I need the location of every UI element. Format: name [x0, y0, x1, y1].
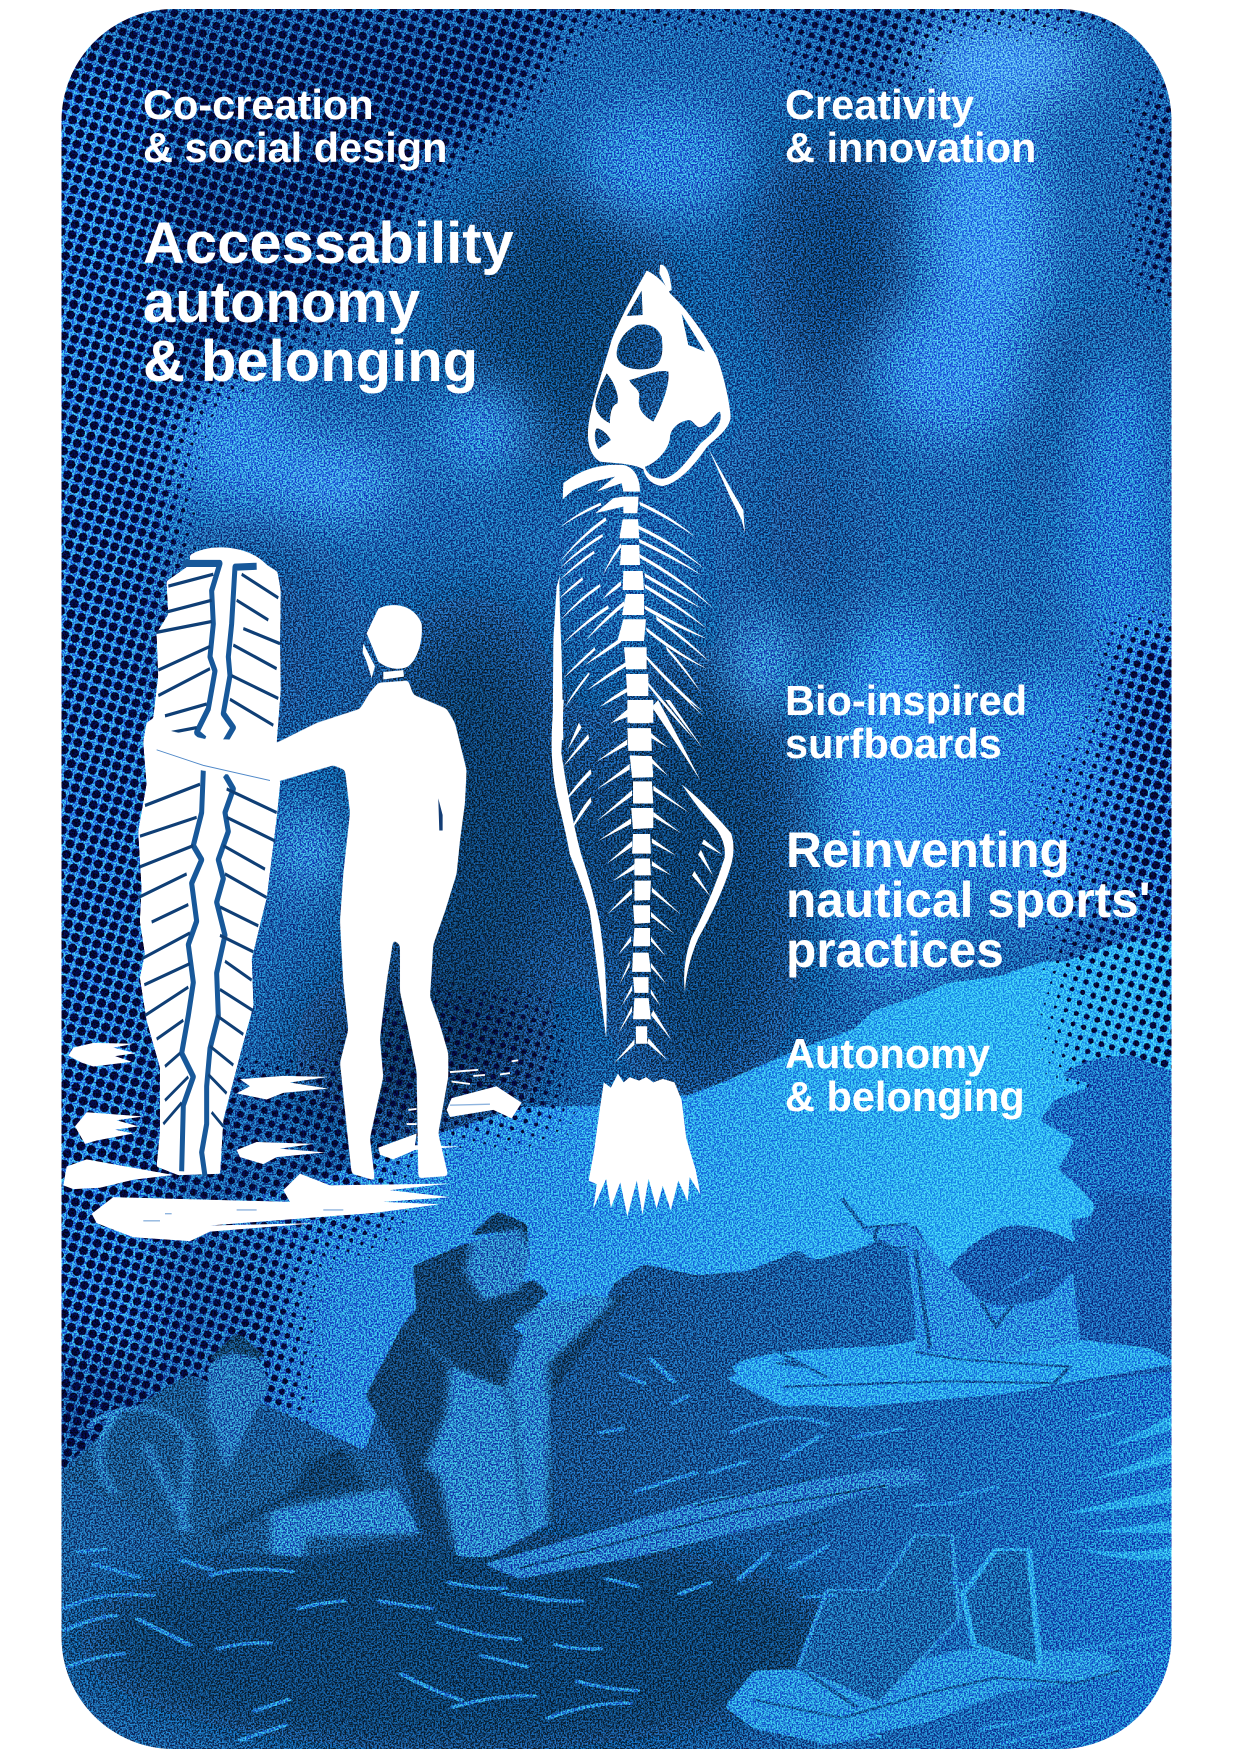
- lower ribs: [596, 712, 690, 1064]
- heading: co-creation: Co-creation: [143, 81, 374, 128]
- background clouds: [30, 10, 1210, 1360]
- boat, upper right: [732, 1198, 1179, 1407]
- illustration: bio-inspired surfboard: [138, 547, 281, 1176]
- label: bio-inspired surfboards: surfboards: [785, 720, 1002, 767]
- heading: creativity: Creativity: [785, 81, 974, 128]
- fish skull and upper ribs: [553, 265, 745, 740]
- heading: reinventing nautical sports' practices: Reinventing: [786, 822, 1070, 878]
- heading: reinventing nautical sports' practices: practices: [786, 922, 1004, 978]
- heading: accessability: & belonging: [143, 329, 478, 394]
- heading: co-creation: & social design: [143, 124, 447, 171]
- upper right ribs: [638, 502, 714, 739]
- left man: [62, 1332, 420, 1557]
- fish lower ribs, belly and tail: [552, 700, 733, 1216]
- surfer face and neck: [363, 644, 404, 680]
- heading: reinventing nautical sports' practices: nautical sports': [786, 872, 1151, 928]
- heading: accessability: autonomy: [143, 270, 420, 335]
- surfboard rib gaps: [138, 574, 280, 1126]
- illustration: fish skeleton: [552, 265, 745, 1216]
- label: autonomy and belonging: Autonomy: [785, 1030, 990, 1077]
- center man with surfboard: [365, 1211, 629, 1557]
- white brush strokes under surfer: [63, 1043, 522, 1241]
- label: bio-inspired surfboards: Bio-inspired: [785, 677, 1027, 724]
- arm contour: [157, 750, 270, 780]
- back shadow: [438, 798, 443, 831]
- surfboard central seams: [182, 563, 257, 1176]
- dark water mass: [50, 1224, 1179, 1754]
- water ripples: [65, 1359, 1168, 1744]
- fish tail: [589, 1074, 700, 1216]
- heading: creativity: & innovation: [785, 124, 1036, 171]
- illustration: surfer in wetsuit: [143, 605, 467, 1181]
- halftone dots: [62, 9, 1172, 1470]
- lower scene: dark water and workshop figures: [50, 1198, 1179, 1754]
- heading: accessability: Accessability: [143, 211, 514, 276]
- dark wave and splash, right: [949, 1055, 1172, 1389]
- label: autonomy and belonging: & belonging: [785, 1073, 1025, 1120]
- boat, lower right: [725, 1535, 1124, 1744]
- light sea area: [159, 937, 1172, 1449]
- upper left ribs: [559, 503, 630, 724]
- belly outline: [553, 575, 563, 740]
- bright cyan wave lenses: [1062, 1409, 1172, 1560]
- surfboard on bench: [483, 1469, 926, 1579]
- dark bottom shadow: [79, 1531, 842, 1751]
- surfer head: [367, 605, 422, 669]
